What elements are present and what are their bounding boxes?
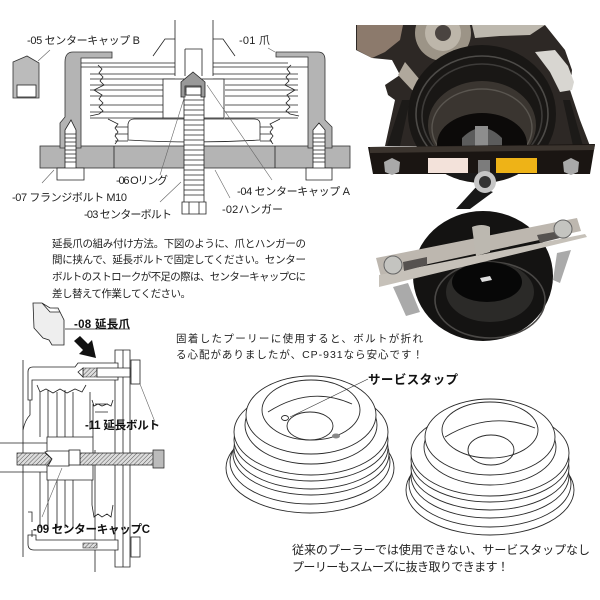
text block: extension claw instructions: 延長爪の組み付け方法。下図のように、爪とハンガーの: [52, 237, 306, 250]
label -08: -08 延長爪: [74, 317, 130, 331]
-01 claw left: [60, 52, 112, 148]
text block: extension claw instructions: 間に挟んで、延長ボルトで固定してください。センター: [52, 253, 306, 266]
text block: seized pulley note: [176, 332, 424, 361]
photo: tool mounted on engine: [356, 5, 595, 209]
engine block: [356, 25, 590, 146]
slots: [403, 231, 560, 271]
label -09: -09 センターキャップC: [33, 523, 150, 536]
-08 extension claw part: [33, 303, 64, 345]
-03 center bolt: [182, 95, 206, 214]
text block: seized pulley note: 固着したプーリーに使用すると、ボルトが折れ: [176, 332, 424, 345]
legs: [393, 250, 571, 316]
-02 hanger plate: [40, 146, 350, 168]
label -06: -06 Oリング: [116, 173, 168, 187]
plate and frame: [23, 350, 130, 572]
diagram: puller cross-section: [38, 20, 350, 214]
-07 flange bolt right: [306, 123, 332, 180]
label -04: -04 センターキャップ A: [237, 185, 351, 198]
labels on bar: [428, 158, 468, 173]
center bolt: [17, 453, 154, 465]
text block: no service tap note: プーリーもスムーズに抜き取りできます！: [292, 559, 509, 574]
label -01: -01 爪: [239, 35, 270, 47]
upper claw and bolt: [28, 363, 118, 400]
pulley: [408, 45, 556, 183]
-05 center cap B detail: [13, 56, 39, 98]
label -11: -11 延長ボルト: [85, 418, 160, 432]
wrench: [456, 186, 493, 209]
text block: extension claw instructions: 差し替えて作業してください。: [52, 287, 191, 300]
text block: no service tap note: 従来のプーラーでは使用できない、サービスタップなし: [292, 542, 590, 557]
lower claw and bolt: [28, 535, 118, 550]
hanger bar: [368, 144, 595, 174]
leader lines: [38, 48, 275, 202]
text block: extension claw instructions: ボルトのストロークが不足の際は、センターキャップCに: [52, 270, 306, 283]
arrow: [74, 336, 96, 358]
text block: no service tap note: [292, 542, 590, 574]
pulley with service tap: [226, 376, 394, 513]
label -02: -02ハンガー: [222, 203, 283, 216]
photo: tool on removed pulley: [376, 211, 587, 341]
label -07: -07 フランジボルト M10: [12, 191, 127, 204]
text block: seized pulley note: る心配がありましたが、CP-931なら安心です！: [176, 348, 423, 361]
bracket arms: [387, 100, 583, 146]
flange bolts: [384, 158, 579, 175]
pulley body: [80, 20, 308, 144]
center cap C block: [47, 437, 93, 480]
label -05: -05 センターキャップ B: [27, 34, 140, 47]
hanger bars: [376, 218, 581, 277]
diagram: extension claw assembly: [0, 303, 164, 572]
text block: extension claw instructions: [52, 237, 306, 300]
-07 flange bolt left: [57, 120, 84, 180]
pulley without service tap: [406, 399, 574, 535]
-04 center cap A: [181, 72, 205, 97]
bolts: [384, 256, 402, 274]
-01 claw right: [276, 52, 332, 148]
label: service tap: サービスタップ: [368, 372, 458, 387]
pulley grooves: [37, 385, 113, 528]
label -03: -03 センターボルト: [84, 208, 172, 221]
